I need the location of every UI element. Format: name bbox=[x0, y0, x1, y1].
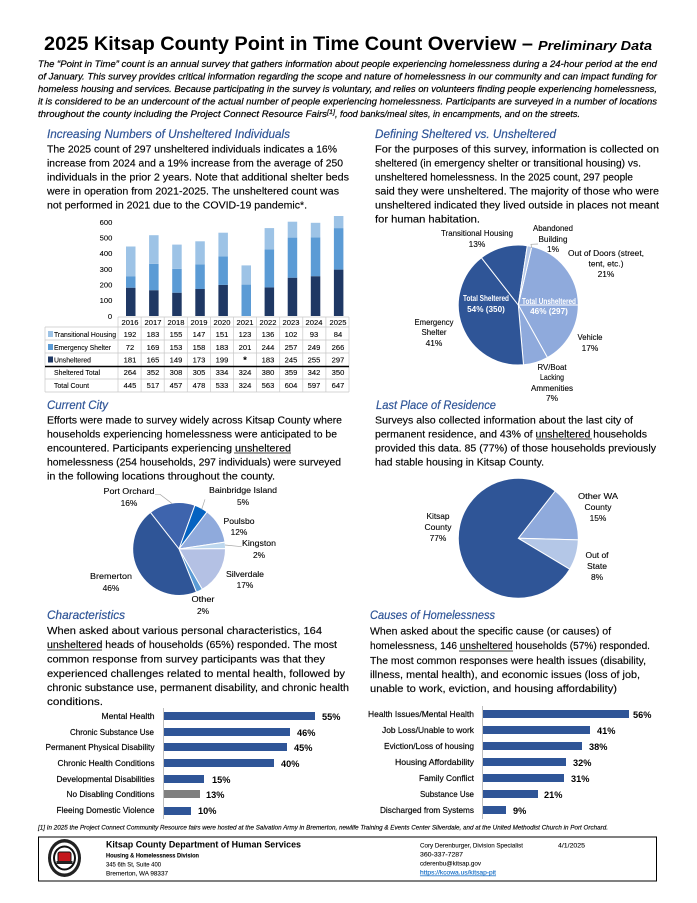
heading: causes of homelessness: Causes of Homelessness bbox=[370, 608, 495, 622]
pie labels: Out of Doors (street, bbox=[568, 248, 644, 258]
pie labels: current city bbox=[90, 485, 277, 616]
text block: characteristics: common response from survey participants was that they bbox=[47, 654, 326, 666]
panel: characteristics bbox=[46, 608, 349, 819]
bar chart: characteristics: 15% bbox=[212, 775, 230, 785]
intro paragraph: throughout the county including the Project Connect Resource Fairs bbox=[38, 109, 327, 119]
text block: current city: encountered. Participants experiencing unsheltered bbox=[47, 444, 291, 454]
data table: 478 bbox=[193, 381, 205, 390]
data table: * bbox=[243, 355, 247, 365]
text block: unsheltered increase: The 2025 count of 297 unsheltered individuals indicates a 16% bbox=[47, 144, 337, 156]
bar chart: causes: 32% bbox=[573, 758, 591, 768]
date: 4/1/2025 bbox=[558, 842, 586, 850]
data table: 245 bbox=[285, 356, 297, 364]
data table: Emergency Shelter bbox=[54, 343, 111, 352]
data table: 183 bbox=[147, 330, 159, 339]
data table: 169 bbox=[147, 343, 159, 352]
text block: causes: illness, mental health), and economic issues (loss of job, bbox=[370, 670, 640, 681]
stacked bar chart bbox=[100, 216, 343, 321]
data table: 334 bbox=[216, 368, 228, 377]
panel: last place of residence bbox=[375, 398, 657, 598]
data table: 2023 bbox=[283, 318, 299, 327]
text block: unsheltered increase: individuals in the prior 2 years. Note that additional shelter beds bbox=[47, 172, 349, 184]
text block: causes: homelessness, 146 unsheltered households (57%) responded. bbox=[370, 641, 650, 652]
bar chart: causes bbox=[368, 706, 651, 819]
pie labels: current city: 46% bbox=[103, 583, 120, 593]
pie labels: last place of residence bbox=[424, 491, 618, 582]
pie labels: current city: 2% bbox=[197, 606, 210, 616]
pie labels: last place of residence: 15% bbox=[590, 513, 607, 523]
data table: 2019 bbox=[191, 318, 207, 327]
intro paragraph: , food banks/meal sites, in encampments, and on the streets. bbox=[335, 109, 580, 119]
data table: 597 bbox=[308, 381, 320, 390]
department contact block bbox=[106, 838, 301, 878]
pie labels: 46% (297) bbox=[530, 307, 568, 316]
bar chart: characteristics: Chronic Health Conditions bbox=[58, 758, 154, 768]
pie labels bbox=[414, 223, 644, 403]
text block: causes: The most common responses were health issues (disability, bbox=[370, 656, 646, 667]
stacked bar chart: 300 bbox=[100, 265, 112, 274]
data table: Sheltered Total bbox=[54, 368, 100, 377]
pie labels: current city: 16% bbox=[121, 498, 138, 508]
data table: 249 bbox=[308, 343, 320, 352]
bar chart: characteristics: Chronic Substance Use bbox=[70, 727, 154, 737]
panel: causes of homelessness bbox=[368, 608, 651, 819]
pie labels: Vehicle bbox=[578, 332, 603, 342]
stacked bar chart: 0 bbox=[108, 312, 112, 321]
text block: last place of residence: Surveys also collected information about the last city of bbox=[375, 416, 633, 426]
pie chart: last place of residence bbox=[458, 478, 578, 598]
data table: Total Count bbox=[54, 381, 90, 390]
data table: 155 bbox=[170, 330, 182, 339]
pie labels: current city: 17% bbox=[237, 580, 254, 590]
pie labels: tent, etc.) bbox=[588, 258, 624, 268]
heading: characteristics: Characteristics bbox=[47, 608, 125, 622]
stacked bar chart: 400 bbox=[100, 249, 112, 258]
pie labels: last place of residence: County bbox=[584, 502, 612, 512]
data table: 147 bbox=[193, 330, 205, 339]
text block: causes: unable to work, eviction, and housing affordability) bbox=[370, 684, 617, 695]
data table: 158 bbox=[193, 343, 205, 352]
bar chart: causes: 31% bbox=[571, 774, 589, 784]
bar chart: characteristics: Mental Health bbox=[102, 711, 155, 721]
staff contact block: 360-337-7287 bbox=[420, 852, 464, 858]
bar chart: causes: 56% bbox=[633, 710, 651, 720]
text block: characteristics: experienced challenges related to mental health, followed by bbox=[47, 669, 346, 680]
data table: 445 bbox=[124, 381, 136, 390]
data table: 173 bbox=[193, 356, 205, 364]
bar chart: characteristics: 13% bbox=[206, 790, 224, 800]
text block: characteristics: unsheltered heads of households (65%) responded. The most bbox=[47, 640, 337, 651]
text block: definitions: unsheltered indicated they lived outside in places not meant bbox=[375, 200, 659, 212]
data table: Transitional Housing bbox=[54, 330, 116, 339]
staff contact block: Cory Derenburger, Division Specialist bbox=[420, 842, 523, 850]
text block: last place of residence: permanent residence, and 43% of unsheltered households bbox=[375, 430, 647, 440]
pie labels: current city: Poulsbo bbox=[224, 516, 255, 526]
footer box bbox=[38, 837, 656, 881]
text block: causes bbox=[370, 626, 650, 695]
text block: current city: Efforts were made to survey widely across Kitsap County where bbox=[47, 416, 342, 426]
bar chart: causes: Substance Use bbox=[420, 789, 474, 799]
pie labels: current city: 2% bbox=[253, 550, 266, 560]
title: 2025 Kitsap County Point in Time Count Overview – bbox=[44, 33, 533, 55]
stacked bar chart: 500 bbox=[100, 234, 112, 242]
staff contact block: cderenbu@kitsap.gov bbox=[420, 860, 482, 868]
data table: 350 bbox=[332, 368, 344, 377]
pie labels: current city: Bremerton bbox=[90, 571, 132, 581]
bar chart: characteristics: Developmental Disabilities bbox=[56, 774, 154, 784]
footnote: [1] In 2025 the Project Connect Community Resource fairs were hosted at the Salvation Army in Bremerton, newlife Training & Events Center Silverdale, and at the United Methodist Church in Port Orchard. bbox=[37, 824, 608, 832]
bar chart: causes: 41% bbox=[597, 726, 615, 736]
pie labels: Total Unsheltered bbox=[522, 297, 576, 306]
pie labels: Building bbox=[538, 234, 568, 244]
data table: 244 bbox=[262, 343, 274, 352]
data table: Unsheltered bbox=[54, 356, 91, 364]
stacked bar chart: 600 bbox=[100, 218, 112, 227]
text block: unsheltered increase: were in operation from 2021-2025. The unsheltered count was bbox=[46, 186, 339, 198]
data table: 149 bbox=[170, 356, 182, 364]
pie labels: current city: Bainbridge Island bbox=[209, 485, 277, 495]
pie labels: last place of residence: State bbox=[587, 561, 607, 571]
stacked bar chart: 200 bbox=[100, 280, 112, 290]
data table: 192 bbox=[124, 330, 136, 339]
data table: 380 bbox=[262, 368, 274, 377]
pie labels: Total Sheltered bbox=[463, 294, 509, 303]
icon: county logo bbox=[48, 839, 81, 877]
data table: 2018 bbox=[168, 318, 184, 327]
text block: current city bbox=[47, 416, 342, 482]
department contact block: Housing & Homelessness Division bbox=[106, 852, 199, 860]
bar chart: causes: Eviction/Loss of housing bbox=[384, 741, 474, 751]
data table: 266 bbox=[332, 343, 344, 352]
data table: 181 bbox=[124, 356, 136, 364]
text block: definitions: unsheltered homelessness. In the 2025 count, 297 people bbox=[375, 172, 633, 184]
leader line: abandoned building bbox=[531, 244, 538, 248]
data table: 153 bbox=[170, 343, 182, 352]
bar chart: characteristics: 55% bbox=[322, 712, 340, 722]
text block: characteristics bbox=[47, 626, 349, 708]
pie labels: current city: Silverdale bbox=[226, 569, 264, 579]
data table: 2025 bbox=[330, 318, 346, 327]
heading: increasing numbers: Increasing Numbers of Unsheltered Individuals bbox=[47, 127, 290, 141]
text block: characteristics: When asked about various personal characteristics, 164 bbox=[47, 626, 322, 637]
pie labels: 54% (350) bbox=[467, 305, 505, 314]
data table: 2020 bbox=[214, 318, 230, 327]
bar chart: causes: 21% bbox=[544, 790, 562, 800]
pie labels: 21% bbox=[598, 269, 615, 279]
data table: 324 bbox=[239, 368, 251, 377]
pie labels: 1% bbox=[547, 244, 560, 254]
bar chart: characteristics: 10% bbox=[198, 806, 216, 816]
data table: 305 bbox=[193, 368, 205, 377]
data table: 457 bbox=[170, 381, 182, 390]
text block: definitions: For the purposes of this survey, information is collected on bbox=[375, 144, 659, 156]
data table: 533 bbox=[216, 381, 228, 390]
data table: 647 bbox=[332, 381, 344, 390]
bar chart: causes: Health Issues/Mental Health bbox=[368, 709, 474, 719]
text block: current city: homelessness (254 households, 297 individuals) were surveyed bbox=[47, 458, 341, 468]
heading: defining sheltered: Defining Sheltered vs. Unsheltered bbox=[375, 127, 556, 141]
intro paragraph: homeless housing and services. Because participating in the survey is voluntary, and relies on volunteers finding people experiencing homelessness, bbox=[38, 84, 657, 94]
pie labels: last place of residence: 77% bbox=[430, 533, 447, 543]
bar chart: characteristics: 40% bbox=[281, 759, 299, 769]
text block: definitions: for human habitation. bbox=[375, 214, 480, 226]
bar chart: causes: Family Conflict bbox=[419, 773, 475, 783]
pie labels: Transitional Housing bbox=[441, 228, 513, 238]
data table: 255 bbox=[308, 356, 320, 364]
data table: 2016 bbox=[122, 318, 138, 327]
intro paragraph bbox=[38, 59, 658, 119]
staff contact block bbox=[420, 842, 523, 876]
bar chart: characteristics: Permanent Physical Disability bbox=[46, 742, 155, 752]
department contact block: Bremerton, WA 98337 bbox=[106, 870, 169, 878]
heading: last place of residence: Last Place of Residence bbox=[376, 398, 496, 412]
data table: 72 bbox=[126, 343, 134, 352]
staff contact block: https://kcowa.us/kitsap-pit bbox=[420, 870, 496, 876]
bar chart: causes: Discharged from Systems bbox=[380, 805, 474, 815]
data table: 324 bbox=[239, 381, 251, 390]
bar chart: causes: 9% bbox=[513, 806, 526, 816]
text block: unsheltered increase: not performed in 2021 due to the COVID-19 pandemic*. bbox=[47, 200, 307, 212]
pie labels: last place of residence: Kitsap bbox=[426, 511, 450, 521]
bar chart: characteristics: 46% bbox=[297, 728, 315, 738]
text block: definitions: said they were unsheltered. The majority of those who were bbox=[375, 186, 659, 198]
intro paragraph: of January. This survey provides critical information regarding the scope and nature of homelessness in our community and can impact funding for bbox=[38, 72, 658, 82]
text block: definitions bbox=[375, 144, 659, 226]
data table: 297 bbox=[332, 356, 344, 364]
title: Preliminary Data bbox=[538, 39, 652, 53]
pie labels: current city: Other bbox=[192, 594, 215, 604]
intro paragraph: [1] bbox=[326, 110, 335, 116]
data table: 2022 bbox=[260, 318, 276, 327]
pie labels: current city: 12% bbox=[231, 527, 248, 537]
panel: increasing numbers of unsheltered individuals bbox=[45, 127, 349, 392]
data table: 2024 bbox=[306, 318, 322, 327]
pie labels: current city: Port Orchard bbox=[104, 486, 155, 496]
department contact block: 345 6th St, Suite 400 bbox=[106, 862, 162, 868]
pie labels: Ammenities bbox=[531, 383, 573, 393]
data table bbox=[45, 317, 349, 392]
pie labels: current city: Kingston bbox=[242, 538, 276, 548]
data table: 264 bbox=[124, 368, 136, 377]
pie chart: sheltered vs unsheltered bbox=[458, 245, 578, 365]
pie labels: current city: 5% bbox=[237, 497, 250, 507]
text block: last place of residence: provided this data. 85 (77%) of those households previously bbox=[375, 444, 657, 454]
panel: current city bbox=[47, 398, 342, 616]
data table: 201 bbox=[239, 343, 251, 352]
pie labels: last place of residence: 8% bbox=[591, 572, 604, 582]
data table: 183 bbox=[262, 356, 274, 364]
bar chart: characteristics: No Disabling Conditions bbox=[66, 789, 154, 799]
bar chart: characteristics: Fleeing Domestic Violence bbox=[56, 805, 155, 815]
pie labels: last place of residence: County bbox=[424, 522, 452, 532]
pie labels: 7% bbox=[546, 393, 559, 403]
data table: 359 bbox=[285, 368, 297, 377]
pie labels: last place of residence: Out of bbox=[586, 550, 609, 560]
text block: definitions: sheltered (in emergency shelter or transitional housing) vs. bbox=[375, 158, 641, 170]
data table: 308 bbox=[170, 368, 182, 377]
intro paragraph: The “Point in Time” count is an annual survey that gathers information about people experiencing homelessness during a 24-hour period at the end bbox=[38, 59, 658, 69]
data table: 604 bbox=[285, 381, 297, 390]
pie labels: 13% bbox=[469, 239, 486, 249]
data table: 352 bbox=[147, 368, 159, 377]
pie labels: 17% bbox=[582, 343, 599, 353]
text block: unsheltered increase bbox=[46, 144, 349, 212]
leader lines: current city bbox=[155, 494, 242, 547]
data table: 2021 bbox=[237, 318, 253, 327]
data table: 199 bbox=[216, 356, 228, 364]
pie labels: last place of residence: Other WA bbox=[578, 491, 618, 501]
pie labels: Abandoned bbox=[533, 223, 573, 233]
data table: 2017 bbox=[145, 318, 161, 327]
pie labels: Lacking bbox=[540, 372, 564, 382]
data table: 563 bbox=[262, 381, 274, 390]
text block: current city: in the following locations throughout the county. bbox=[47, 472, 275, 482]
text block: causes: When asked about the specific cause (or causes) of bbox=[370, 626, 611, 638]
data table: 93 bbox=[310, 330, 318, 339]
pie labels: Emergency bbox=[414, 317, 454, 327]
text block: unsheltered increase: increase from 2024 and a 19% increase from the average of 250 bbox=[47, 158, 343, 170]
bar chart: causes: 38% bbox=[589, 742, 607, 752]
pie labels: 41% bbox=[426, 338, 443, 348]
data table: 84 bbox=[334, 330, 342, 339]
pie labels: Shelter bbox=[422, 327, 447, 337]
data table: 136 bbox=[262, 330, 274, 339]
data table: 183 bbox=[216, 343, 228, 352]
heading: current city: Current City bbox=[47, 398, 109, 412]
text block: characteristics: conditions. bbox=[47, 697, 103, 708]
data table: 151 bbox=[216, 330, 228, 339]
data table: 257 bbox=[285, 343, 297, 352]
data table: 517 bbox=[147, 381, 159, 390]
bar chart: causes: Job Loss/Unable to work bbox=[382, 725, 475, 735]
bar chart: causes: Housing Affordability bbox=[395, 757, 475, 767]
pie chart: current city bbox=[133, 503, 226, 595]
data table: 165 bbox=[147, 356, 159, 364]
text block: last place of residence bbox=[375, 416, 657, 468]
data table: 123 bbox=[239, 330, 251, 339]
data table: 102 bbox=[285, 330, 297, 339]
pie labels: RV/Boat bbox=[538, 362, 567, 372]
intro paragraph: it is considered to be an undercount of the actual number of people experiencing homelessness. Participants are surveyed in a number of locations bbox=[38, 96, 657, 106]
bar chart: characteristics: 45% bbox=[294, 743, 312, 753]
panel: defining sheltered vs unsheltered bbox=[375, 127, 659, 403]
text block: characteristics: chronic substance use, permanent disability, and chronic health bbox=[47, 683, 349, 694]
text block: current city: households experiencing homelessness were anticipated to be bbox=[47, 430, 337, 440]
data table: 342 bbox=[308, 368, 320, 377]
stacked bar chart: 100 bbox=[100, 296, 112, 305]
department contact block: Kitsap County Department of Human Services bbox=[106, 838, 301, 850]
text block: last place of residence: had stable housing in Kitsap County. bbox=[375, 458, 544, 468]
bar chart: characteristics bbox=[46, 708, 340, 819]
